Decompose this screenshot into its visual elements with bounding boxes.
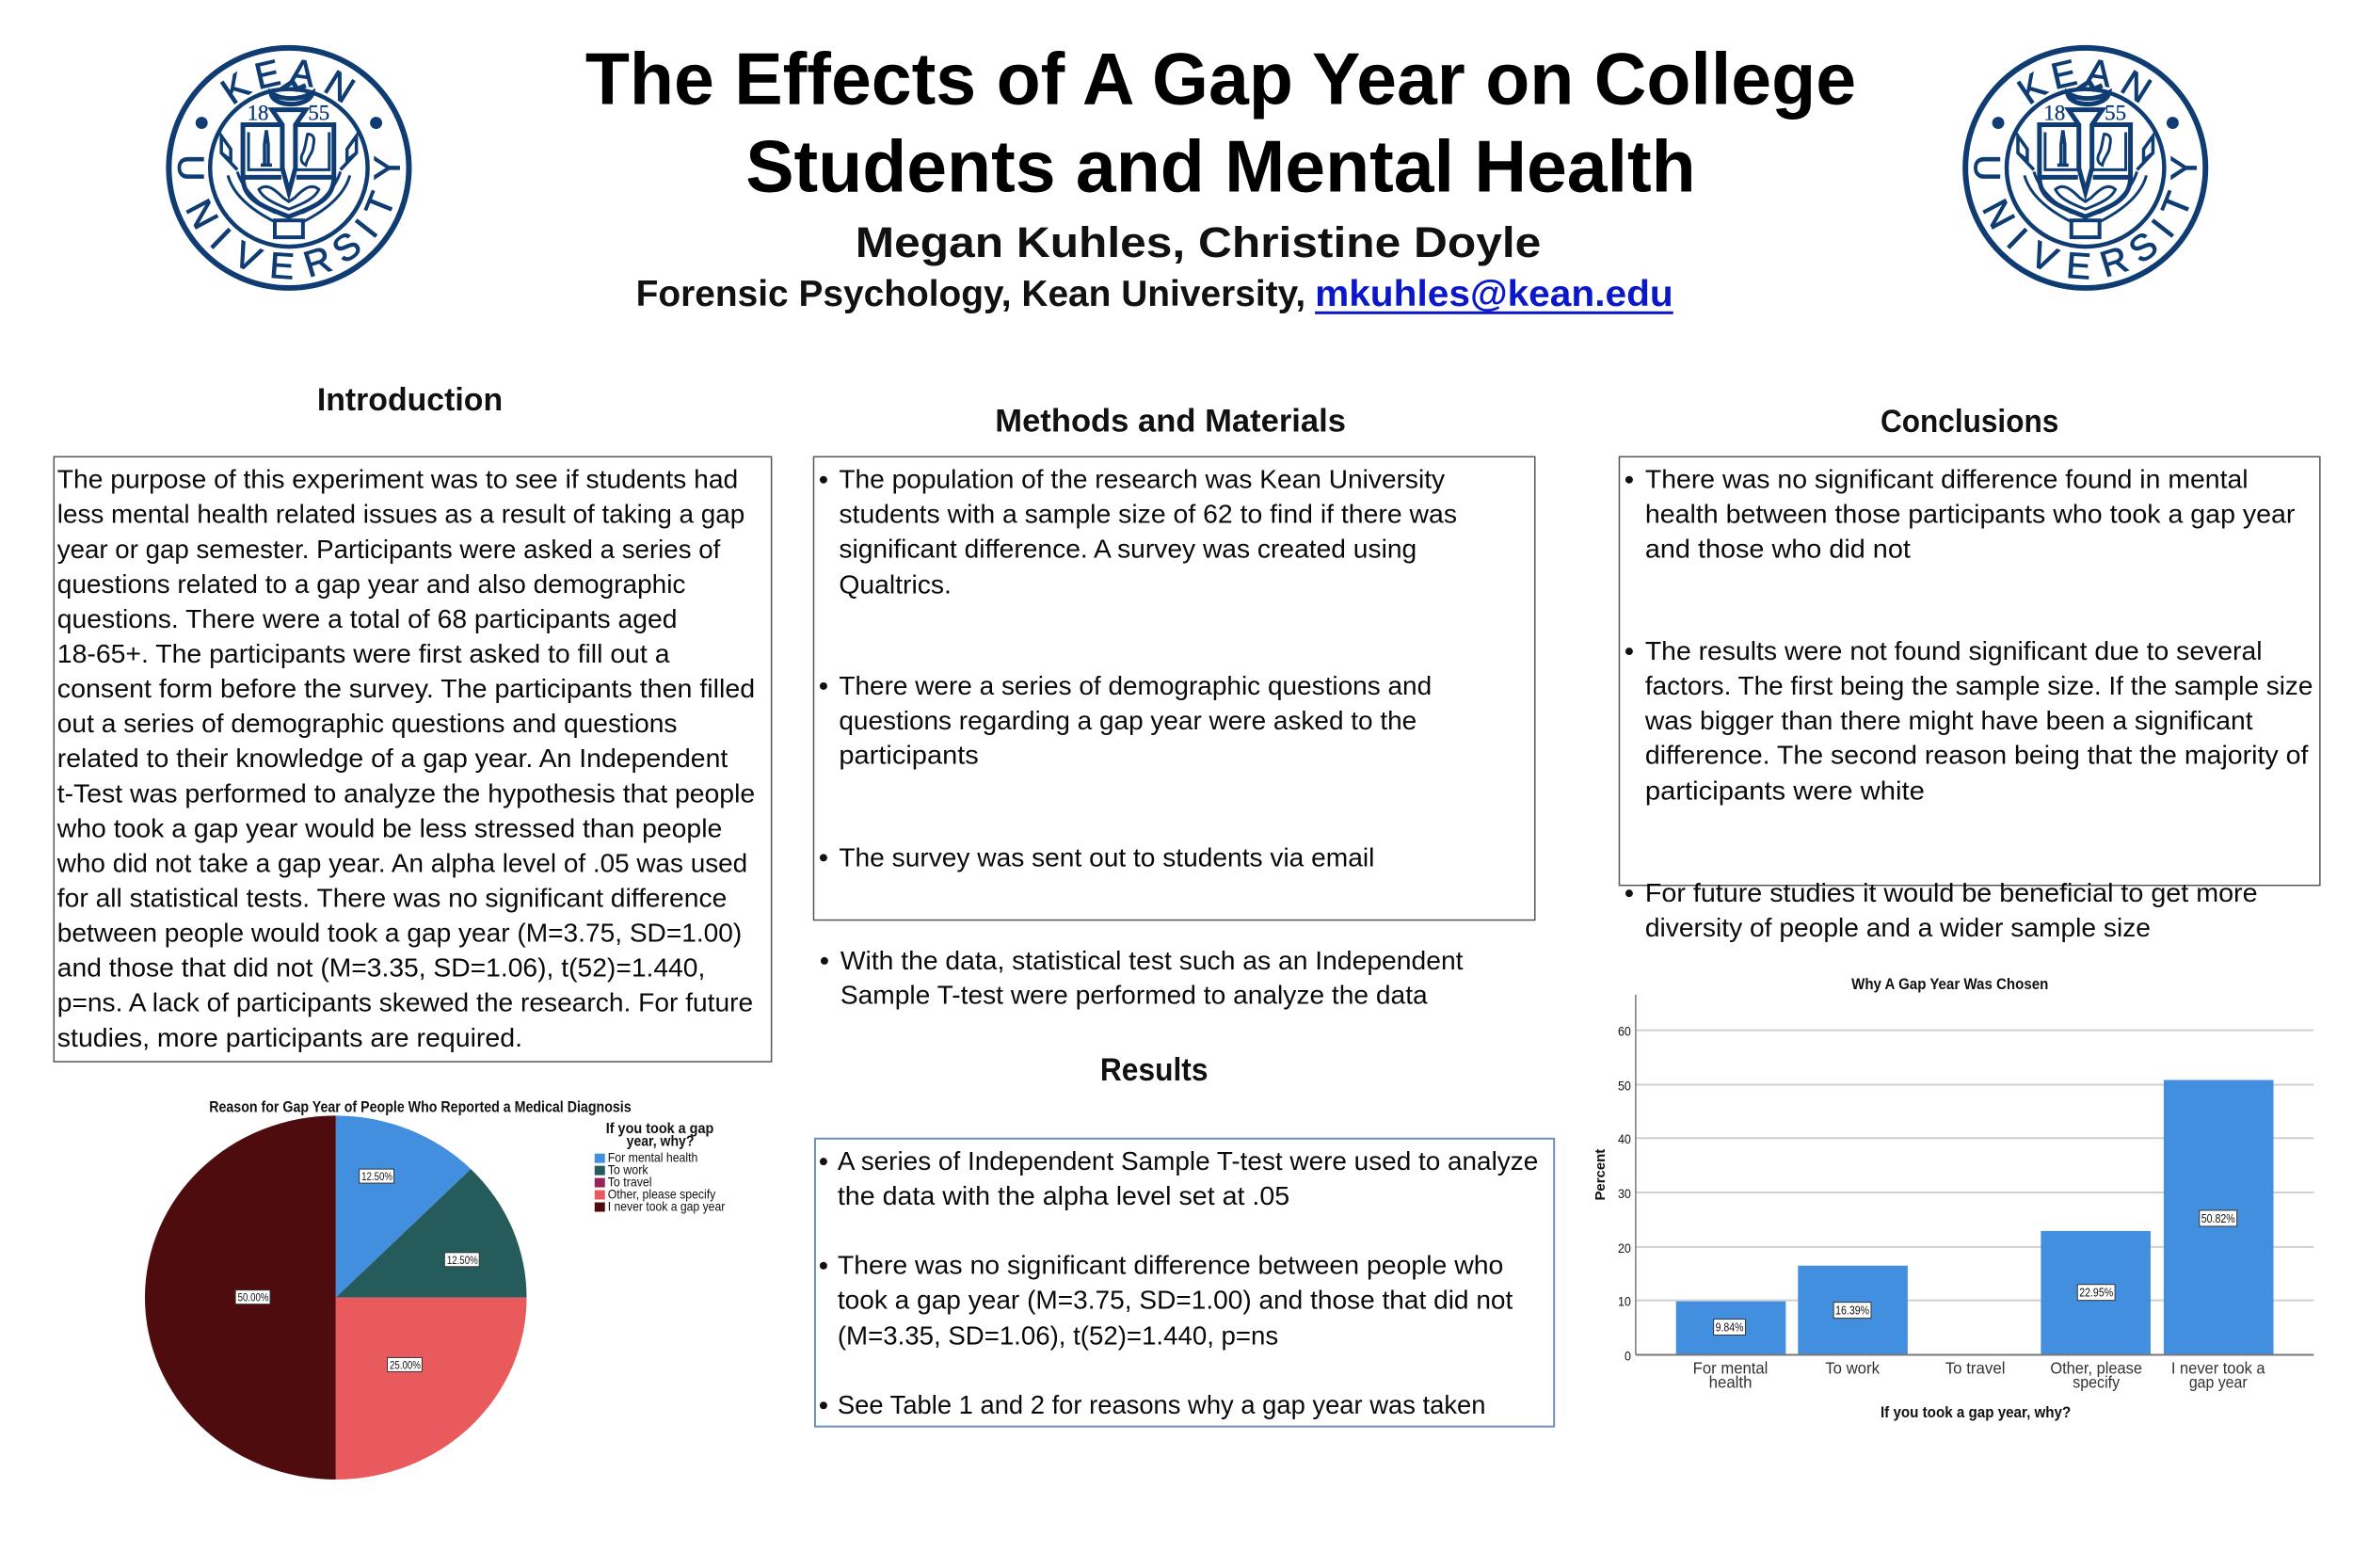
pie value labels: 25.00% [390, 1358, 421, 1371]
y axis title: Percent [1593, 1149, 1609, 1201]
affiliation and email: mkuhles@kean.edu [1315, 274, 1673, 314]
x axis categories: specify [2073, 1372, 2120, 1391]
logo: Kean University seal right: N [2114, 63, 2158, 111]
bar chart grid and axes [1636, 995, 2313, 1354]
pie value labels [235, 1169, 479, 1371]
logo: Kean University seal left: Y [368, 155, 408, 180]
x axis categories: health [1709, 1372, 1752, 1391]
affiliation and email [636, 274, 1673, 314]
panel: methods and materials: The survey was sent out to students via email [839, 842, 1374, 872]
panel: results: A series of Independent Sample T-test were used to analyze [838, 1146, 1538, 1176]
logo: Kean University seal right [1965, 48, 2205, 288]
panel: methods and materials: The population of the research was Kean University [839, 465, 1445, 494]
panel: introduction: less mental health related issues as a result of taking a gap [57, 500, 744, 529]
panel: results: (M=3.35, SD=1.06), t(52)=1.440, p=ns [838, 1320, 1278, 1350]
logo: Kean University seal right: I [1999, 221, 2035, 257]
logo: Kean University seal left: I [202, 221, 238, 257]
pie slices [145, 1115, 527, 1480]
x axis categories [1693, 1358, 2265, 1391]
logo: Kean University seal right: N [1974, 193, 2023, 235]
pie legend: To travel [608, 1175, 652, 1190]
y axis ticks: 40 [1618, 1131, 1631, 1146]
panel: methods and materials: students with a sample size of 62 to find if there was [839, 500, 1457, 529]
pie chart: reason for gap year [145, 1097, 726, 1480]
panel: conclusions: participants were white [1645, 776, 1925, 806]
panel: conclusions: was bigger than there might have been a significant [1644, 706, 2253, 735]
panel: introduction: p=ns. A lack of participants skewed the research. For future [57, 988, 753, 1017]
panel: introduction: out a series of demographic questions and questions [57, 709, 677, 738]
logo: Kean University seal right: Y [2164, 155, 2204, 180]
panel: results: took a gap year (M=3.75, SD=1.00) and those that did not [838, 1286, 1513, 1315]
logo: Kean University seal right: 18 [2043, 102, 2065, 125]
heading: methods and materials: Methods and Materials [995, 403, 1346, 439]
panel: conclusions: difference. The second reason being that the majority of [1645, 741, 2309, 770]
logo: Kean University seal left: T [358, 187, 404, 223]
logo: Kean University seal left: R [299, 239, 336, 286]
y axis ticks: 30 [1618, 1186, 1631, 1201]
panel: results: There was no significant difference between people who [838, 1251, 1503, 1280]
y axis ticks [1618, 1024, 1631, 1363]
logo: Kean University seal left: V [228, 234, 266, 281]
panel: introduction: studies, more participants are required. [57, 1023, 522, 1052]
panel: results: the data with the alpha level set at .05 [838, 1181, 1289, 1210]
panel: introduction: who did not take a gap year. An alpha level of .05 was used [56, 848, 747, 877]
logo: Kean University seal right: 55 [2105, 102, 2126, 125]
pie value labels: 50.00% [238, 1291, 269, 1304]
logo: Kean University seal right: T [2154, 187, 2201, 223]
panel: introduction: The purpose of this experiment was to see if students had [57, 465, 738, 494]
x axis categories: To travel [1945, 1358, 2006, 1377]
logo: Kean University seal left: A [287, 52, 317, 95]
panel: conclusions: diversity of people and a wider sample size [1645, 913, 2151, 942]
logo: Kean University seal right: I [2144, 213, 2183, 246]
logo: Kean University seal left: K [215, 65, 257, 113]
title: The Effects of A Gap Year on College [585, 40, 1856, 120]
logo: Kean University seal right: S [2121, 224, 2166, 271]
logo: Kean University seal left: 18 [248, 102, 268, 125]
logo: Kean University seal left: N [178, 193, 226, 235]
bar value labels: 9.84% [1716, 1320, 1744, 1335]
x axis categories: gap year [2189, 1372, 2248, 1391]
panel: methods and materials [813, 456, 1535, 920]
panel: conclusions: The results were not found significant due to several [1645, 636, 2263, 665]
pie legend: Other, please specify [608, 1187, 715, 1202]
bars [1676, 1080, 2274, 1354]
panel: introduction: t-Test was performed to analyze the hypothesis that people [57, 778, 755, 808]
panel: introduction: year or gap semester. Participants were asked a series of [57, 535, 721, 564]
panel: conclusions: For future studies it would be beneficial to get more [1645, 878, 2258, 907]
affiliation and email: Forensic Psychology, Kean University, [636, 274, 1305, 314]
panel: methods and materials: participants [839, 741, 979, 770]
logo: Kean University seal left [168, 48, 408, 288]
text block: methods overflow bullet: With the data, statistical test such as an Independent [840, 946, 1464, 975]
panel: results [815, 1139, 1554, 1427]
panel: introduction [54, 456, 772, 1062]
heading: introduction: Introduction [317, 382, 503, 418]
logo: Kean University seal right: U [1966, 154, 2007, 181]
pie legend: If you took a gap [606, 1121, 714, 1137]
bar value labels: 50.82% [2201, 1211, 2235, 1225]
logo: Kean University seal left: E [268, 246, 296, 288]
logo: Kean University seal right: R [2096, 239, 2133, 286]
text block: methods overflow bullet [821, 946, 1464, 1010]
panel: introduction: 18-65+. The participants were first asked to fill out a [57, 639, 670, 668]
x axis categories: For mental [1693, 1358, 1768, 1377]
panel: introduction: related to their knowledge of a gap year. An Independent [57, 744, 728, 773]
panel: conclusions: There was no significant difference found in mental [1645, 465, 2249, 494]
bar chart: why a gap year was chosen [1593, 975, 2313, 1421]
panel: introduction: between people would took a gap year (M=3.75, SD=1.00) [57, 919, 742, 948]
pie legend: For mental health [608, 1150, 697, 1165]
panel: methods and materials: questions regarding a gap year were asked to the [839, 706, 1417, 735]
x axis categories: Other, please [2050, 1358, 2142, 1377]
panel: methods and materials: significant difference. A survey was created using [839, 534, 1417, 563]
y axis ticks: 60 [1618, 1024, 1631, 1039]
pie value labels: 12.50% [361, 1170, 392, 1183]
logo: Kean University seal left: I [347, 213, 386, 246]
panel: conclusions: factors. The first being the sample size. If the sample size [1645, 671, 2313, 700]
bar value labels [1714, 1210, 2237, 1336]
panel: methods and materials: Qualtrics. [839, 569, 952, 599]
panel: methods and materials: There were a series of demographic questions and [839, 671, 1432, 700]
logo: Kean University seal left: N [317, 63, 361, 111]
panel: conclusions: health between those participants who took a gap year [1645, 500, 2295, 529]
pie legend [595, 1121, 726, 1213]
panel: introduction: consent form before the survey. The participants then filled [57, 674, 755, 703]
panel: results: See Table 1 and 2 for reasons why a gap year was taken [838, 1390, 1485, 1419]
bar chart title: Why A Gap Year Was Chosen [1851, 975, 2048, 993]
panel: introduction: questions. There were a total of 68 participants aged [57, 604, 677, 633]
pie legend: I never took a gap year [608, 1198, 726, 1213]
panel: introduction: questions related to a gap year and also demographic [57, 569, 685, 599]
logo: Kean University seal right: K [2010, 65, 2054, 113]
pie chart title: Reason for Gap Year of People Who Reported a Medical Diagnosis [209, 1097, 632, 1115]
y axis ticks: 10 [1618, 1294, 1631, 1309]
panel: conclusions: and those who did not [1645, 534, 1911, 563]
logo: Kean University seal right: E [2047, 53, 2080, 98]
logo: Kean University seal left: U [169, 154, 210, 181]
bar value labels: 22.95% [2079, 1286, 2114, 1300]
pie legend: To work [608, 1162, 648, 1177]
text block: methods overflow bullet: Sample T-test were performed to analyze the data [840, 981, 1428, 1010]
heading: conclusions: Conclusions [1881, 404, 2058, 440]
x axis categories: I never took a [2171, 1358, 2265, 1377]
title [585, 40, 1856, 207]
logo: Kean University seal left: E [251, 53, 284, 98]
logo: Kean University seal left: S [326, 224, 369, 271]
authors: Megan Kuhles, Christine Doyle [856, 218, 1541, 266]
bar value labels: 16.39% [1835, 1304, 1869, 1318]
y axis ticks: 0 [1625, 1348, 1631, 1363]
y axis ticks: 20 [1618, 1240, 1631, 1256]
panel: conclusions [1619, 456, 2320, 942]
logo: Kean University seal right: E [2065, 246, 2092, 288]
logo: Kean University seal right: A [2084, 52, 2114, 95]
panel: introduction: and those that did not (M=3.35, SD=1.06), t(52)=1.440, [57, 953, 705, 983]
pie legend: year, why? [627, 1134, 694, 1150]
heading: results: Results [1100, 1052, 1208, 1088]
panel: introduction: who took a gap year would be less stressed than people [56, 813, 722, 842]
logo: Kean University seal left: 55 [308, 102, 329, 125]
title: Students and Mental Health [745, 126, 1696, 207]
x axis categories: To work [1825, 1358, 1880, 1377]
x axis title: If you took a gap year, why? [1881, 1403, 2071, 1421]
y axis ticks: 50 [1618, 1078, 1631, 1093]
panel: introduction: for all statistical tests. There was no significant difference [57, 884, 727, 913]
logo: Kean University seal right: V [2024, 234, 2063, 281]
pie value labels: 12.50% [447, 1254, 478, 1267]
